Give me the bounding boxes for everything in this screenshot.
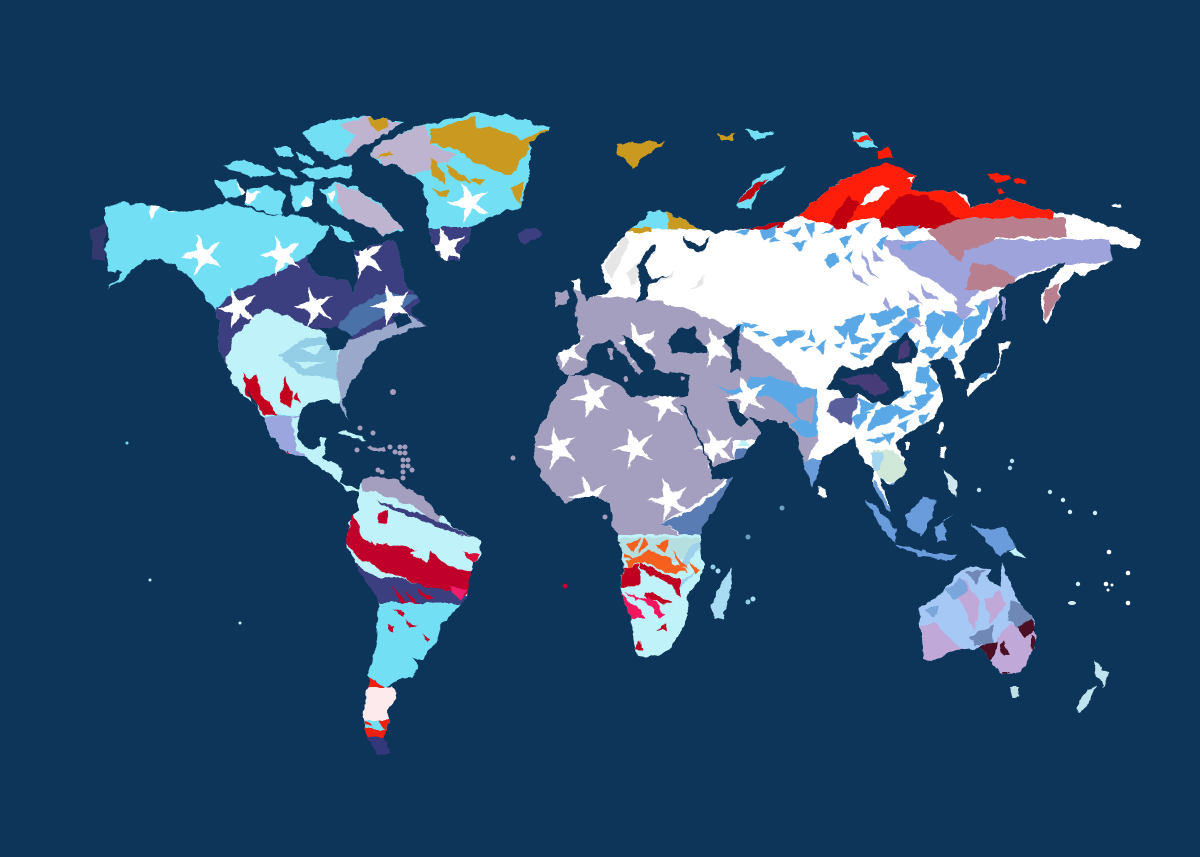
panel: Australia <box>910 555 1040 680</box>
panel: Arctic Canada islands <box>214 116 404 242</box>
gold ice sheet <box>430 117 550 175</box>
grey Scandinavia shards <box>604 235 705 290</box>
red main band <box>345 513 470 600</box>
lavender Europe Middle East Africa <box>520 290 818 540</box>
Philippines <box>938 448 957 497</box>
blue shards East Asia <box>835 300 1000 445</box>
gold shards <box>375 150 525 205</box>
blue shards Central Asia <box>735 322 825 355</box>
red band <box>364 728 387 738</box>
Indochina pale zone <box>872 450 908 482</box>
red triangle band <box>368 678 385 688</box>
Indonesia and New Guinea <box>865 497 1027 560</box>
pale cut in shards <box>295 345 325 368</box>
navy band <box>350 560 470 610</box>
rose patches <box>928 218 1066 262</box>
Cuba and Caribbean islands <box>337 430 385 450</box>
slate stripes <box>338 292 418 338</box>
orange Africa <box>625 550 687 573</box>
Sakhalin <box>1002 298 1006 322</box>
island dots <box>126 389 1130 624</box>
Mexico lavender <box>262 416 307 458</box>
red Africa <box>620 563 680 650</box>
Black Sea <box>667 327 707 353</box>
Caspian Sea <box>723 327 743 373</box>
Madagascar <box>712 568 732 620</box>
pink Africa <box>622 593 647 618</box>
panel: North America <box>104 200 427 492</box>
lavender west coast <box>370 125 458 175</box>
Svalbard <box>615 142 665 169</box>
Mediterranean islands <box>609 347 685 382</box>
Persian Gulf <box>727 402 750 427</box>
lavender overlay <box>340 116 402 157</box>
grey Venezuela and Guianas <box>360 470 440 525</box>
Franz Josef Land <box>717 130 775 140</box>
red shards <box>243 373 300 455</box>
eastern USA lavender <box>336 316 426 417</box>
navy south tip <box>429 226 471 261</box>
panel: Greenland <box>370 112 550 261</box>
Wrangel Island <box>1110 205 1121 209</box>
red Arctic Russia <box>790 162 1055 225</box>
Severnaya Zemlya <box>850 131 895 158</box>
pale blue shards <box>278 337 338 380</box>
stars <box>434 183 488 261</box>
panel: Alaska western fringe <box>90 222 105 262</box>
White Sea <box>681 236 710 252</box>
white snow hole in red <box>858 186 890 205</box>
lavender Siberia <box>881 240 1112 309</box>
navy tip <box>367 736 391 755</box>
red streaks <box>393 586 435 608</box>
Novaya Zemlya <box>735 167 786 211</box>
pale pink band <box>362 686 396 721</box>
blue patches north <box>925 578 970 618</box>
stars <box>536 322 765 521</box>
Africa south pale <box>600 535 715 670</box>
British Isles <box>555 280 592 316</box>
Japan <box>967 342 1012 397</box>
Mediterranean <box>570 335 690 398</box>
blue shards north <box>735 222 925 268</box>
slate band East Africa <box>660 450 750 540</box>
maroon blots <box>980 620 1036 678</box>
pink patch <box>450 585 468 600</box>
panel: Eurasia and Africa <box>520 162 1160 670</box>
land masses <box>90 105 1160 758</box>
cyan band <box>340 603 490 679</box>
red shards on cyan <box>387 608 430 643</box>
lower cyan band <box>364 719 390 731</box>
navy flag band <box>215 240 427 406</box>
blue stripes south east Africa <box>680 540 703 570</box>
Taiwan Hainan Sri Lanka <box>819 422 944 498</box>
lilac patches <box>920 580 1040 680</box>
slate patches <box>965 570 1035 645</box>
Gulf of California <box>249 388 258 410</box>
Baltic Sea <box>637 244 670 302</box>
world map <box>90 112 1141 755</box>
Gulf of St Lawrence <box>392 313 412 328</box>
India tip <box>800 460 825 495</box>
Great Lakes <box>317 327 353 350</box>
navy strip <box>376 500 475 538</box>
blue Iran and Himalaya zone <box>713 377 818 437</box>
red north east <box>462 552 480 565</box>
Iceland <box>517 227 543 243</box>
New Siberian Islands <box>988 173 1028 194</box>
dark red band <box>881 195 1005 229</box>
dark inland region <box>826 331 919 405</box>
Nordic cap <box>628 208 696 229</box>
Tasmania <box>1010 687 1020 698</box>
white star fragments <box>236 180 336 208</box>
New Zealand <box>1075 660 1108 713</box>
pale USA area <box>226 308 358 492</box>
pale grey band <box>610 538 700 560</box>
gold patch <box>368 116 390 132</box>
purple inland patches <box>840 340 910 395</box>
lavender shards <box>852 248 998 325</box>
stars <box>149 205 410 329</box>
panel: South America <box>346 476 482 755</box>
